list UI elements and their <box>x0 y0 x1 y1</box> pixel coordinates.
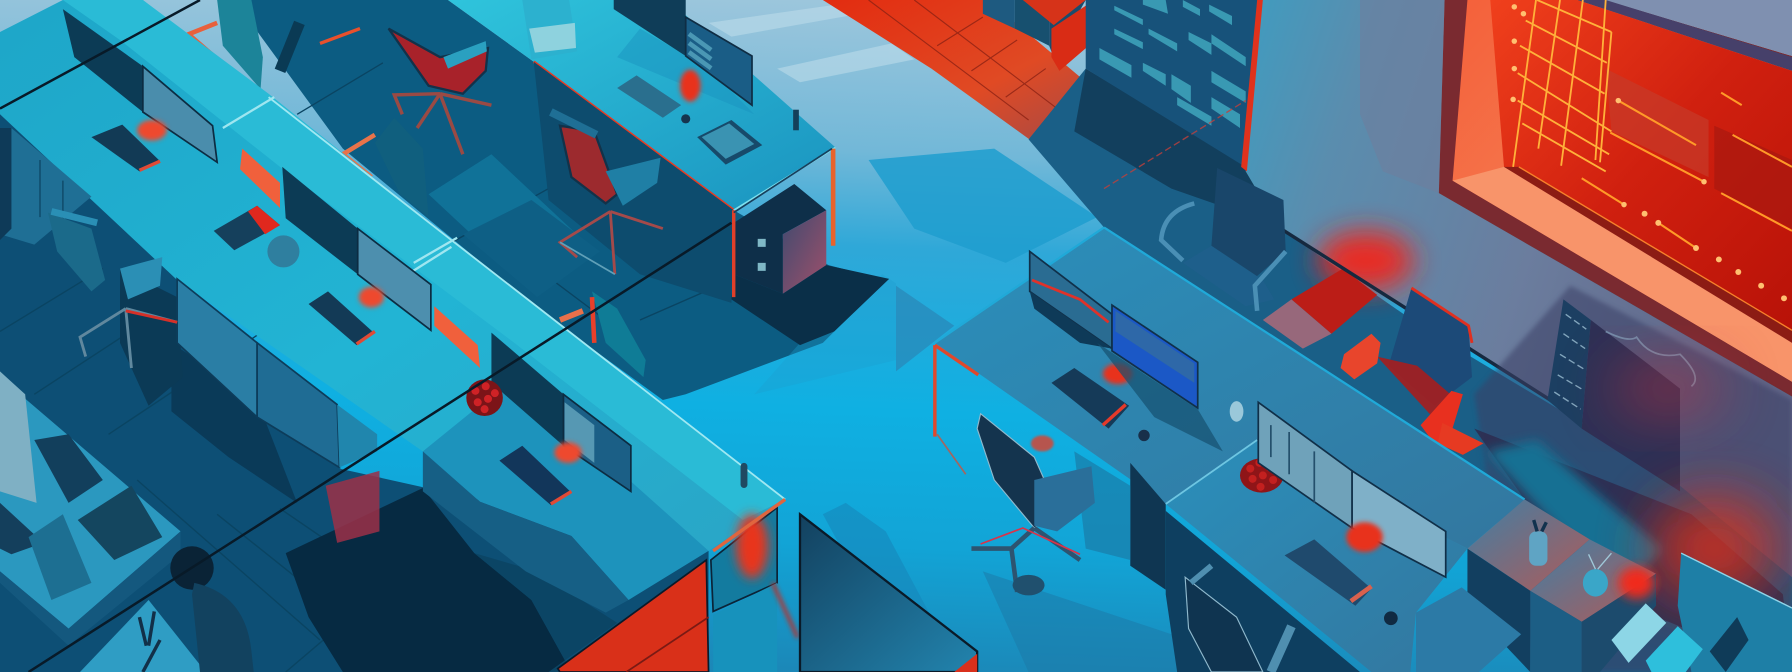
red partition panels <box>240 149 480 368</box>
monitor 2 on desk B <box>282 167 431 330</box>
neon grid on screen <box>1513 0 1792 330</box>
small lamp on desk B end <box>741 463 747 488</box>
chair: teal glass back upper <box>343 118 429 217</box>
red panel reflection under desk B <box>326 471 379 543</box>
red glow by cabinet <box>1618 567 1655 599</box>
desk A keyboard, tablet, glow <box>617 70 799 165</box>
monitor: document display pair <box>1258 402 1446 577</box>
small plant on side cabinet <box>1583 553 1611 597</box>
red floor patch <box>1291 269 1377 334</box>
red flower on desk B <box>466 379 503 416</box>
black reflective diagonal lines <box>0 0 731 672</box>
window frame dark outer <box>1439 0 1792 397</box>
floor tile lines on red strip <box>869 0 1057 120</box>
monitor 1 on desk B <box>63 9 217 162</box>
desk A: under-desk dark side <box>534 62 734 303</box>
wall <box>1246 0 1792 577</box>
desk C: front leg frame <box>935 345 978 474</box>
chair: left blue <box>48 211 177 368</box>
whiteboard panel on wall <box>1086 0 1263 189</box>
neon lines on screen <box>1582 93 1792 248</box>
side cabinets <box>1467 499 1656 672</box>
desk C: edge highlight <box>935 227 1525 499</box>
shadow: behind left chair <box>120 269 183 406</box>
left wall cabinet <box>0 128 91 245</box>
floor highlights: light patches at top of aisle <box>709 0 914 82</box>
chair C: below desk C <box>971 414 1095 595</box>
shadow: darker step beside lower floor shadow <box>474 553 617 672</box>
desk D: second desk segment <box>1166 440 1467 672</box>
monitor: chart display pair <box>1030 251 1198 408</box>
lower-left aisle glass edge <box>754 274 896 394</box>
bottom strip glow <box>1453 167 1792 382</box>
pale floor patch <box>1263 299 1331 349</box>
reflected dark room panel <box>1474 286 1792 672</box>
glass box at bottom center <box>800 514 977 672</box>
desk A monitors <box>614 0 752 105</box>
keyboard and stand on desk C <box>1051 363 1150 441</box>
monitor 3 on desk B <box>491 333 631 491</box>
whiteboard notes <box>1099 0 1246 128</box>
red flower on desk D <box>1240 458 1283 493</box>
glass panel with red glow <box>711 507 798 672</box>
notebook on desk A <box>522 0 577 59</box>
tablet on desk B <box>214 206 280 250</box>
dark floor band near wall <box>1074 69 1286 229</box>
chair: mid red under desk A <box>551 112 663 274</box>
cabinet by desk A <box>734 184 826 294</box>
neon dots on screen <box>1510 4 1787 301</box>
floor: dark band along the far wall <box>1029 69 1792 672</box>
red glow lower right <box>1651 497 1777 600</box>
keyboards on desk B <box>91 125 571 505</box>
chair: upper center red <box>389 29 491 154</box>
red glow under window <box>1318 231 1414 290</box>
shadow: dark shadow on lower floor <box>286 488 571 672</box>
floor tile lines <box>0 63 731 672</box>
desk C: dark under-desk panel <box>1130 463 1166 590</box>
low box on desk corner <box>1416 587 1521 672</box>
shadow under cabinet <box>731 265 889 345</box>
keyboard and mouse on desk D <box>1285 522 1398 625</box>
window top wedge: grey panel <box>1577 0 1792 71</box>
dark room floor <box>1474 429 1792 672</box>
floor light panel below desk A <box>429 154 583 274</box>
desk B end: orange edge <box>713 499 785 551</box>
desk B: front panels <box>177 279 377 467</box>
server rack on wall <box>1547 299 1680 491</box>
window frame lit border <box>1453 0 1792 382</box>
wall panel corner shading <box>1360 0 1445 193</box>
lower desk B surface shadow <box>423 377 709 600</box>
red screen <box>1453 0 1792 382</box>
chair: bottom under desk D <box>1185 566 1291 672</box>
blue bench blur <box>1486 440 1663 583</box>
faint red laser line <box>1104 101 1246 189</box>
red boxes at bottom center <box>558 560 709 672</box>
aisle shadows on the floor <box>823 149 1189 672</box>
desk C: right long desk surface <box>935 227 1525 549</box>
chair: red accent <box>1341 288 1483 455</box>
desk B: bright partition top <box>63 0 785 520</box>
chair: teal glass back top <box>189 0 360 89</box>
desk E: lower left desk surface <box>0 371 181 646</box>
glass floor block under desk B <box>423 451 629 613</box>
pen cup on desk B <box>267 235 299 267</box>
desk A: upper right desk surface <box>448 0 835 210</box>
desk A frame legs <box>734 149 833 297</box>
shadow: under left row monitors <box>171 343 297 503</box>
chair: glass back in mid aisle <box>560 291 646 377</box>
chair: top right dark blue <box>1161 168 1286 311</box>
floor: dark aisle between desks <box>234 0 886 400</box>
white cable sketch <box>1606 331 1695 386</box>
darker screen panels <box>1606 69 1709 177</box>
desk B: cross dividers <box>223 97 457 272</box>
filing cabinets at back <box>983 0 1091 71</box>
desk B: long partition and desk surface <box>0 0 785 551</box>
desk F: bottom left desk corner <box>80 600 206 672</box>
figure: dark person silhouette <box>170 546 254 672</box>
shadow cast on desk C <box>1097 343 1223 451</box>
red strip: floor by far wall <box>823 0 1097 143</box>
floor: dark left side <box>0 103 709 672</box>
corner monitor and white boxes <box>1611 553 1792 672</box>
red glows on desk B <box>137 120 582 463</box>
pen cup on side cabinet <box>1529 520 1547 566</box>
cup on desk C <box>1230 401 1243 422</box>
desk C: shadow below edge <box>1074 451 1130 560</box>
wall base dark line <box>1279 227 1662 471</box>
desk B: partition edge highlight <box>269 97 785 499</box>
